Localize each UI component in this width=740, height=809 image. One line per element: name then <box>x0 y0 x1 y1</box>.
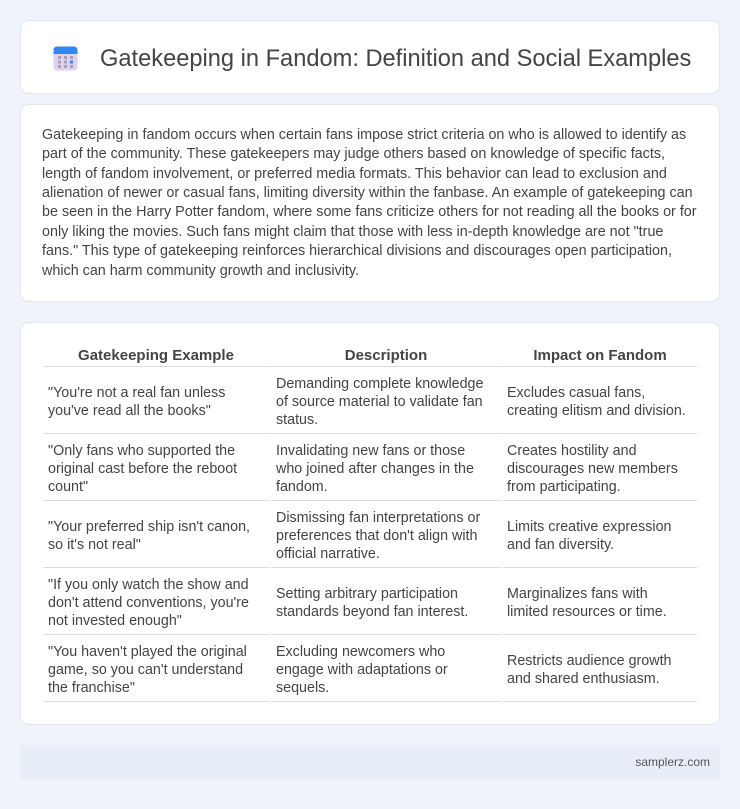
row 4: don't attend conventions, you're <box>48 595 249 611</box>
row 2: Creates hostility and <box>507 443 637 459</box>
column header: description: Description <box>345 347 427 364</box>
row 1: of source material to validate fan <box>276 394 483 410</box>
row 2: original cast before the reboot <box>48 461 237 477</box>
column header: impact: Impact on Fandom <box>533 347 667 364</box>
row 3: so it's not real" <box>48 537 141 553</box>
icon: calendar <box>54 46 78 70</box>
row 4: limited resources or time. <box>507 604 667 620</box>
intro text <box>42 127 697 279</box>
row 1: creating elitism and division. <box>507 403 686 419</box>
row 3: "Your preferred ship isn't canon, <box>48 519 250 535</box>
intro text: Gatekeeping in fandom occurs when certain fans impose strict criteria on who is allowed to identify as <box>42 127 686 143</box>
row 3: official narrative. <box>276 546 380 562</box>
row 2: discourages new members <box>507 461 678 477</box>
row 5: and shared enthusiasm. <box>507 671 660 687</box>
row 4: not invested enough" <box>48 613 182 629</box>
row 4: Setting arbitrary participation <box>276 586 458 602</box>
row 4 <box>48 577 667 629</box>
row 3: and fan diversity. <box>507 537 614 553</box>
table <box>43 347 697 702</box>
row 3 <box>48 510 671 562</box>
row 2: fandom. <box>276 479 328 495</box>
intro text: alienation of newer or casual fans, limiting diversity within the fanbase. An example of gatekeeping can <box>42 185 693 201</box>
intro text: be seen in the Harry Potter fandom, where some fans criticize others for not reading all the books or for <box>42 204 697 220</box>
row 2 <box>48 443 678 495</box>
row 1 <box>48 376 686 428</box>
footer bar <box>20 745 720 779</box>
row 5: engage with adaptations or <box>276 662 448 678</box>
row 5 <box>48 644 672 696</box>
row 2: Invalidating new fans or those <box>276 443 465 459</box>
row 4: standards beyond fan interest. <box>276 604 468 620</box>
intro text: which can harm community growth and inclusivity. <box>42 263 359 279</box>
row 3: Dismissing fan interpretations or <box>276 510 480 526</box>
row 5: Excluding newcomers who <box>276 644 445 660</box>
intro text: part of the community. These gatekeepers may judge others based on knowledge of specific facts, <box>42 146 665 162</box>
row 5: game, so you can't understand <box>48 662 243 678</box>
row 2: "Only fans who supported the <box>48 443 235 459</box>
row 2: from participating. <box>507 479 621 495</box>
row 4: "If you only watch the show and <box>48 577 249 593</box>
row 1: you've read all the books" <box>48 403 211 419</box>
row 1: status. <box>276 412 318 428</box>
row 1: Excludes casual fans, <box>507 385 645 401</box>
table panel <box>20 322 720 725</box>
intro text: only liking the movies. Such fans might claim that those with less in-depth knowledge are not "true <box>42 224 663 240</box>
row 1: "You're not a real fan unless <box>48 385 225 401</box>
column header: example: Gatekeeping Example <box>78 347 234 364</box>
intro text: fans." This type of gatekeeping reinforces hierarchical divisions and discourages open participation, <box>42 243 672 259</box>
row 2: count" <box>48 479 88 495</box>
row 5: "You haven't played the original <box>48 644 247 660</box>
row 3: preferences that don't align with <box>276 528 477 544</box>
row 3: Limits creative expression <box>507 519 671 535</box>
row 5: Restricts audience growth <box>507 653 672 669</box>
header panel <box>20 20 720 94</box>
row 5: sequels. <box>276 680 329 696</box>
row 2: who joined after changes in the <box>276 461 474 477</box>
row 1: Demanding complete knowledge <box>276 376 483 392</box>
intro text: length of fandom involvement, or preferred media formats. This behavior can lead to exclusion and <box>42 166 667 182</box>
footer text: samplerz.com <box>635 755 710 769</box>
row 4: Marginalizes fans with <box>507 586 648 602</box>
intro panel <box>20 104 720 302</box>
title: Gatekeeping in Fandom: Definition and Social Examples <box>100 46 691 72</box>
row 5: the franchise" <box>48 680 135 696</box>
